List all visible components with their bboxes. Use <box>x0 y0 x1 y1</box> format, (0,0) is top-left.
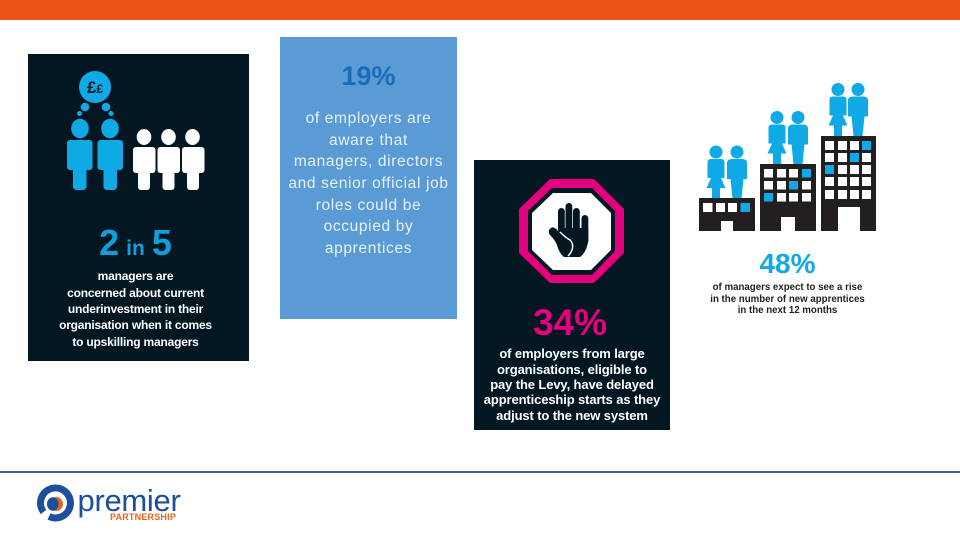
stat: 48%: 48% <box>759 248 816 279</box>
text: employers aware: roles could be <box>316 197 421 214</box>
logo: premier partnership <box>37 483 180 522</box>
text: employers aware: and senior official job <box>288 175 449 192</box>
icon: people with money thought bubble: ££ <box>87 78 103 97</box>
building: middle <box>760 164 816 231</box>
icon: people on rising buildings <box>699 83 876 231</box>
people: tall building <box>828 83 868 136</box>
stat: 19%: 19% <box>341 61 396 91</box>
text: employers delayed: adjust to the new system <box>496 408 648 423</box>
text: managers concern: underinvestment in their <box>68 302 203 316</box>
text: managers expect: of managers expect to see a rise <box>713 282 862 293</box>
text: managers expect: in the next 12 months <box>738 305 837 316</box>
stat: 34%: 34% <box>533 302 607 343</box>
panel: 2 in 5 managers <box>28 54 249 361</box>
text: employers aware <box>288 110 449 257</box>
panel: 34% of employers <box>474 160 670 430</box>
text: employers aware: managers, directors <box>294 153 443 170</box>
icon: stop sign with hand <box>519 179 624 283</box>
text: employers delayed: of employers from large <box>499 346 645 361</box>
logo wordmark: premier <box>78 483 180 518</box>
text: employers aware: aware that <box>329 132 408 149</box>
logo subtitle: PARTNERSHIP <box>110 512 176 522</box>
panel: 19% of employers <box>280 37 457 319</box>
building: low <box>699 198 755 231</box>
text: employers aware: of employers are <box>306 110 431 127</box>
text: employers delayed: apprenticeship starts as they <box>484 392 660 407</box>
panel: 48% of managers <box>699 83 876 316</box>
text: employers delayed: pay the Levy, have delayed <box>490 377 654 392</box>
icon: logo ring <box>37 484 74 522</box>
icon: people with money thought bubble <box>67 71 204 190</box>
text: managers expect <box>710 282 865 316</box>
stat: 2 in 5: 2 in 5 <box>99 222 172 263</box>
text: employers delayed <box>484 346 660 423</box>
text: employers delayed: organisations, eligible to <box>497 362 647 377</box>
text: managers concern: to upskilling managers <box>72 335 199 349</box>
text: employers aware: apprentices <box>325 240 412 257</box>
footer divider <box>0 471 960 472</box>
text: managers concern: managers are <box>98 269 173 283</box>
building: tall <box>821 136 876 231</box>
text: managers concern: concerned about current <box>67 286 204 300</box>
people: low building <box>706 146 747 198</box>
people: middle building <box>768 111 808 164</box>
top orange bar <box>0 0 960 20</box>
text: managers concern: organisation when it comes <box>59 318 212 332</box>
text: managers expect: in the number of new apprentices <box>710 294 865 305</box>
text: managers concern <box>59 269 212 349</box>
text: employers aware: occupied by <box>324 218 413 235</box>
